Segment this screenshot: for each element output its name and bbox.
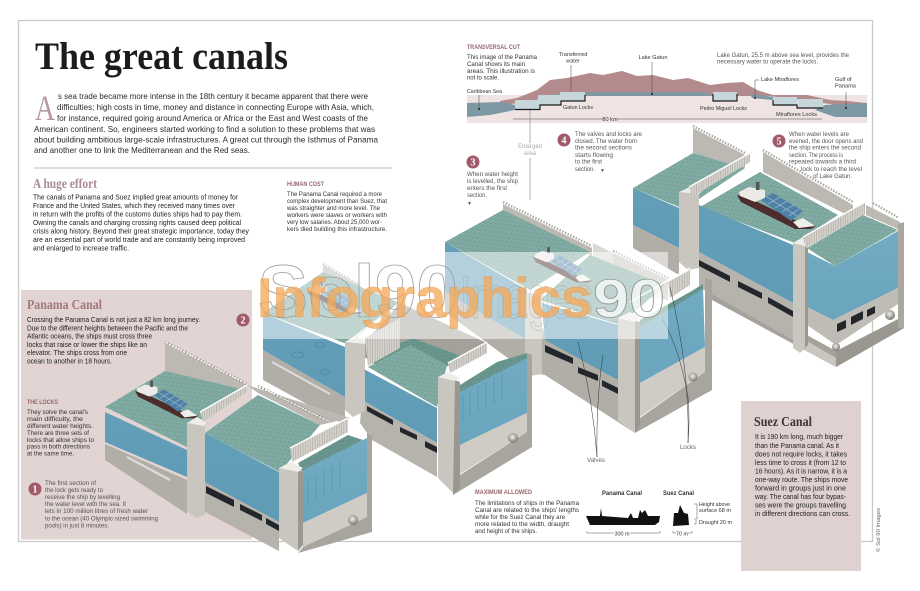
- step 5: evened, the door opens and: [789, 138, 863, 145]
- culverts: [807, 288, 898, 345]
- watermark: Images: [460, 264, 593, 331]
- ship size comparison: Draught 20 m: [699, 520, 733, 526]
- step 5: repeated towards a third: [789, 158, 856, 166]
- maximum allowed text: Canal are related to the ships' lengths: [475, 507, 579, 514]
- right blue face: [807, 231, 898, 320]
- watermark number: 90: [593, 269, 665, 329]
- cross-section labels: areas. This illustration is: [467, 68, 535, 75]
- intro paragraph: and another one to link the Mediterranean and the Red seas.: [34, 145, 250, 155]
- step 4: [558, 131, 642, 174]
- step 1: lets in 100 million litres of fresh water: [45, 508, 148, 515]
- step 5: lock to reach the level: [801, 166, 862, 173]
- body text: suez canal: [754, 432, 850, 518]
- left blue face: [263, 313, 345, 397]
- step 5: the ship enters the second: [789, 144, 861, 152]
- intro paragraph: about building ambitious large-scale infrastructures. A great cut through the Isthmus of Panama: [34, 134, 378, 144]
- step 5: 5: [776, 136, 782, 148]
- body text: a huge effort: Owning the canals and charging crossing rights caused deep political: [33, 218, 241, 227]
- left water: [445, 210, 590, 290]
- left chamber water: [633, 153, 745, 207]
- body text: suez canal: does not require locks, it takes: [755, 450, 847, 458]
- gate 1: [365, 318, 400, 366]
- body text: suez canal: ses were the groups travelling: [755, 500, 846, 510]
- middle water: [205, 395, 320, 472]
- enlarged area indicator: Enlarged: [518, 144, 542, 150]
- ship: [533, 247, 592, 282]
- ground: [467, 95, 867, 123]
- step 1: receive the ship by levelling: [45, 494, 120, 501]
- cross-section labels: This image of the Panama: [467, 54, 537, 61]
- step 3: enters the first: [467, 185, 507, 192]
- ground fill under lake: [467, 96, 867, 117]
- middle back wall: [365, 303, 487, 358]
- body text: suez canal: one-way route. The ships move: [755, 475, 848, 484]
- ship: [737, 182, 816, 229]
- step 1: [28, 480, 158, 530]
- step 3: is levelled, the ship: [467, 178, 518, 185]
- mountain profile: [500, 71, 867, 105]
- step 1: to the ocean (40 Olympic-sized swimming: [45, 516, 158, 522]
- left water: [105, 371, 245, 447]
- icon: suez ship silhouette: [673, 505, 689, 526]
- sidebar: human cost: very low salaries. About 25,000 wor-: [287, 219, 382, 226]
- gate 2: [448, 342, 487, 373]
- locks: [515, 92, 823, 110]
- the locks note: at the same time.: [27, 450, 74, 458]
- slab and gaps: [699, 252, 793, 340]
- maximum allowed text: and height of the ships.: [475, 528, 537, 535]
- gate 2: [803, 202, 865, 248]
- labels: valves and locks: Locks: [680, 444, 696, 451]
- step 5: [772, 131, 863, 180]
- body text: panama canal: [27, 315, 200, 366]
- left chamber back wall: [693, 128, 745, 168]
- gate 1: [689, 153, 750, 197]
- maximum allowed text: while for the Suez Canal they are: [474, 514, 565, 521]
- the locks note: main difficulty, the: [27, 416, 83, 423]
- pier 1: [345, 342, 365, 417]
- cross-section labels: Panama: [835, 84, 857, 90]
- step 2: [236, 314, 250, 326]
- cross-section labels: Gatun Locks: [563, 105, 593, 111]
- the locks note: They solve the canal's: [27, 409, 88, 416]
- enlarged area indicator: [518, 110, 542, 200]
- intro paragraph: American continent. So, engineers started working to find a solution to these problems that was: [34, 124, 375, 134]
- ship size comparison: Panama Canal: [602, 490, 642, 497]
- ship size comparison: 300 m: [615, 532, 630, 538]
- black gaps: [545, 345, 618, 394]
- gate block: [593, 243, 613, 312]
- left water: [263, 272, 400, 344]
- watermark: [252, 250, 668, 339]
- lower right: [460, 413, 527, 474]
- body text: a huge effort: in return with the profits of the customs duties ships had to pay them.: [33, 210, 242, 218]
- step 1: the lock gets ready to: [45, 487, 103, 494]
- maximum allowed text: more related to the width, draught: [475, 521, 569, 528]
- right blue face: [640, 287, 705, 383]
- base and gaps: [360, 400, 437, 477]
- suez canal text: [754, 415, 850, 518]
- ship size comparison: surface 68 m: [699, 508, 732, 514]
- right back wall: [866, 205, 900, 230]
- cross-section labels: Lake Miraflores: [761, 77, 799, 83]
- right blue face: [303, 438, 367, 523]
- pier 2: [618, 318, 635, 433]
- maximum allowed text: [474, 490, 579, 535]
- cross-section labels: Pedro Miguel Locks: [700, 106, 747, 112]
- maximum allowed text: MAXIMUM ALLOWED: [475, 490, 533, 496]
- lower right: [303, 493, 367, 547]
- panel: suez canal background: [741, 401, 861, 571]
- dimension marks: [587, 504, 697, 533]
- mid water: [540, 255, 665, 325]
- enlarged area indicator: area: [524, 151, 537, 157]
- lower right: [640, 347, 705, 417]
- sidebar: human cost: was straighter and more level. The: [286, 205, 380, 212]
- watermark wash box: [252, 252, 668, 339]
- the locks note: [27, 400, 94, 458]
- body text: suez canal: in different directions can cross.: [755, 509, 850, 518]
- cross-section labels: Lake Gatun: [639, 55, 667, 61]
- sidebar: human cost: [286, 182, 387, 233]
- step 4: starts flowing: [575, 152, 614, 159]
- step 3: When water height: [467, 171, 518, 178]
- ship size comparison: 70 m: [676, 532, 689, 538]
- pier 2: [279, 468, 298, 551]
- icon: panama ship silhouette: [586, 508, 660, 525]
- heading: a huge effort: A huge effort: [33, 177, 97, 192]
- the locks note: pass in both directions: [27, 444, 90, 450]
- the locks note: THE LOCKS: [27, 400, 58, 406]
- pier 1: [187, 423, 205, 518]
- right end wall: [898, 222, 904, 328]
- cross-section labels: Canal shows its main: [467, 61, 525, 68]
- watermark orange text: Infographics: [257, 266, 592, 329]
- middle back wall: [763, 152, 853, 218]
- step 1: pools) in just 8 minutes.: [45, 522, 109, 530]
- step 3: ▼: [467, 201, 472, 207]
- body text: suez canal: way. The canal has four bypas-: [754, 492, 846, 501]
- left base: [105, 444, 187, 514]
- body text: panama canal: Crossing the Panama Canal is not just a 82 km long journey.: [27, 315, 200, 324]
- gate 2: [290, 418, 348, 462]
- step 4: the second sections: [575, 144, 632, 152]
- sidebar: human cost: kers died building this infrastructure.: [287, 226, 387, 233]
- step 2: 2: [240, 316, 246, 326]
- cross-section labels: [467, 45, 857, 123]
- gate 2: [668, 270, 690, 298]
- sidebar: human cost: workers were slaves or workers with: [286, 212, 387, 219]
- back wall: [165, 344, 247, 392]
- ship: [135, 381, 198, 418]
- labels: valves and locks: Valves: [587, 457, 605, 464]
- mid back wall: [613, 253, 668, 300]
- cross-section labels: Lake Gatun, 25.5 m above sea level, provides the: [717, 52, 849, 59]
- step 4: to the first: [575, 158, 602, 166]
- cross-section labels: not to scale.: [467, 74, 499, 82]
- pier 2: [793, 243, 805, 353]
- lock unit 3 (centre right): [445, 202, 712, 433]
- body text: a huge effort: France and the United States, which they received many times over: [33, 201, 235, 210]
- body text: panama canal: Due to the different heights between the Pacific and the: [27, 324, 188, 332]
- leader lines: valves and locks: [578, 287, 689, 457]
- lake miraflores band: [750, 94, 775, 100]
- body text: a huge effort: [33, 192, 249, 252]
- left chamber blue face: [633, 188, 679, 248]
- heading: suez canal: Suez Canal: [754, 415, 812, 430]
- body text: a huge effort: are an essential part of world trade and are constantly being improved: [33, 235, 245, 244]
- middle water: [700, 172, 838, 243]
- credit: © Sol 90 Images: [875, 508, 882, 552]
- body text: panama canal: ocean to another in 18 hours.: [27, 356, 112, 366]
- back wall: [503, 204, 592, 256]
- step 5: section. The process is: [789, 152, 843, 159]
- cross-section labels: 80 km: [602, 117, 618, 123]
- cross-section labels: TRANSVERSAL CUT: [467, 45, 520, 51]
- body text: suez canal: less time to cross it (from 12 to: [755, 458, 846, 467]
- pier 1: [525, 292, 542, 376]
- body text: panama canal: elevator. The ships cross from one: [27, 348, 127, 357]
- drop cap: A: [35, 88, 55, 128]
- step 1: The first section of: [45, 480, 96, 487]
- right water strip: [298, 435, 363, 472]
- cross-section labels: water: [565, 58, 580, 64]
- step 5: of Lake Gatun.: [813, 173, 852, 180]
- right blue face: [460, 355, 527, 445]
- step 3: [466, 156, 518, 207]
- intro paragraph: [34, 88, 378, 155]
- left blue face: [105, 412, 187, 477]
- body text: suez canal: forward in groups just in one: [755, 484, 846, 492]
- panel: panama canal background: [21, 290, 252, 540]
- body text: suez canal: 16 hours). As it is narrow, it is a: [755, 466, 848, 476]
- sidebar: human cost: complex development than Suez, that: [287, 198, 387, 205]
- step 1: the water level with the sea. It: [45, 501, 126, 508]
- gulf of panama: [815, 103, 867, 117]
- ship size comparison: Suez Canal: [663, 490, 694, 497]
- cross-section labels: necessary water to operate the locks.: [717, 58, 818, 66]
- section: a huge effort: [33, 177, 249, 252]
- middle blue face: [699, 205, 793, 303]
- leader lines: [479, 62, 846, 119]
- body text: a huge effort: crisis along history. Beyond their great strategic importance, today they: [33, 226, 249, 236]
- mid blue face: [542, 303, 618, 380]
- base: [445, 292, 527, 372]
- body text: panama canal: locks that raise or lower the ships like an: [27, 340, 147, 349]
- transversal cut diagram: [467, 45, 867, 123]
- step 3: section.: [467, 192, 487, 199]
- heading: panama canal: Panama Canal: [27, 298, 102, 313]
- right back wall: [247, 385, 350, 425]
- body text: a huge effort: The canals of Panama and Suez implied great amounts of money for: [33, 192, 238, 202]
- gate 1: [200, 385, 247, 422]
- left blue face: [445, 242, 527, 340]
- step 4: 4: [562, 136, 566, 146]
- step 4: closed. The water from: [575, 138, 637, 145]
- lock unit 1 (bottom left): [105, 342, 372, 553]
- body text: a huge effort: and enlarged to increase traffic.: [33, 244, 129, 252]
- cross-section labels: Gulf of: [835, 77, 852, 83]
- ship size comparison: Height above: [699, 502, 730, 508]
- lock unit 4 (top right): [633, 126, 904, 367]
- middle blue face: [205, 433, 279, 522]
- body text: suez canal: than the Panama canal. As it: [755, 441, 839, 450]
- cross-section labels: Transferred: [559, 52, 587, 58]
- middle dark water: [365, 338, 463, 372]
- the locks note: There are three sets of: [27, 430, 89, 437]
- left base: [633, 225, 679, 275]
- step 4: section.: [575, 166, 595, 173]
- ship: [307, 281, 362, 314]
- back wall: [323, 265, 362, 298]
- sidebar: human cost: The Panama Canal required a more: [287, 191, 382, 198]
- the locks note: different water heights.: [27, 423, 93, 430]
- lock unit 2 (centre): [263, 264, 532, 495]
- panama canal text: [27, 298, 200, 530]
- body text: suez canal: It is 190 km long, much bigger: [755, 432, 843, 441]
- step 5: When water levels are: [789, 131, 849, 138]
- title: The great canals: [35, 35, 288, 78]
- step 3: 3: [470, 158, 476, 168]
- lake gatun band: [555, 92, 713, 96]
- base: [263, 350, 345, 425]
- intro paragraph: difficulties; high costs in time, money and distance in connecting Europe with Asia, which,: [57, 102, 374, 112]
- step 4: The valves and locks are: [575, 131, 642, 138]
- caribbean sea: [467, 102, 515, 117]
- cross-section labels: Miraflores Locks: [776, 112, 817, 118]
- ship size comparison: [586, 490, 733, 538]
- pier 2: [438, 377, 455, 495]
- sidebar: human cost: HUMAN COST: [287, 182, 324, 188]
- body text: panama canal: Atlantic oceans, the ships must cross three: [27, 332, 152, 340]
- step 4: ▼: [600, 168, 605, 174]
- right chamber water: [807, 215, 898, 266]
- base: [712, 283, 904, 367]
- the locks note: locks that allow ships to: [27, 437, 94, 444]
- middle light water: [368, 345, 447, 407]
- maximum allowed text: The limitations of ships in the Panama: [475, 500, 579, 507]
- intro paragraph: for instance, required going around America or Africa or the East and West coasts of the: [57, 113, 368, 123]
- labels: valves and locks: [587, 444, 696, 464]
- step 1: 1: [32, 484, 38, 496]
- cross-section labels: Caribbean Sea: [467, 89, 503, 95]
- slab and gaps: [205, 482, 279, 551]
- pier 1: [679, 192, 699, 270]
- intro paragraph: s sea trade became more intense in the 18th century it became apparent that there were: [58, 91, 368, 101]
- middle blue face: [360, 367, 437, 443]
- watermark outline text: Sol90: [258, 250, 458, 333]
